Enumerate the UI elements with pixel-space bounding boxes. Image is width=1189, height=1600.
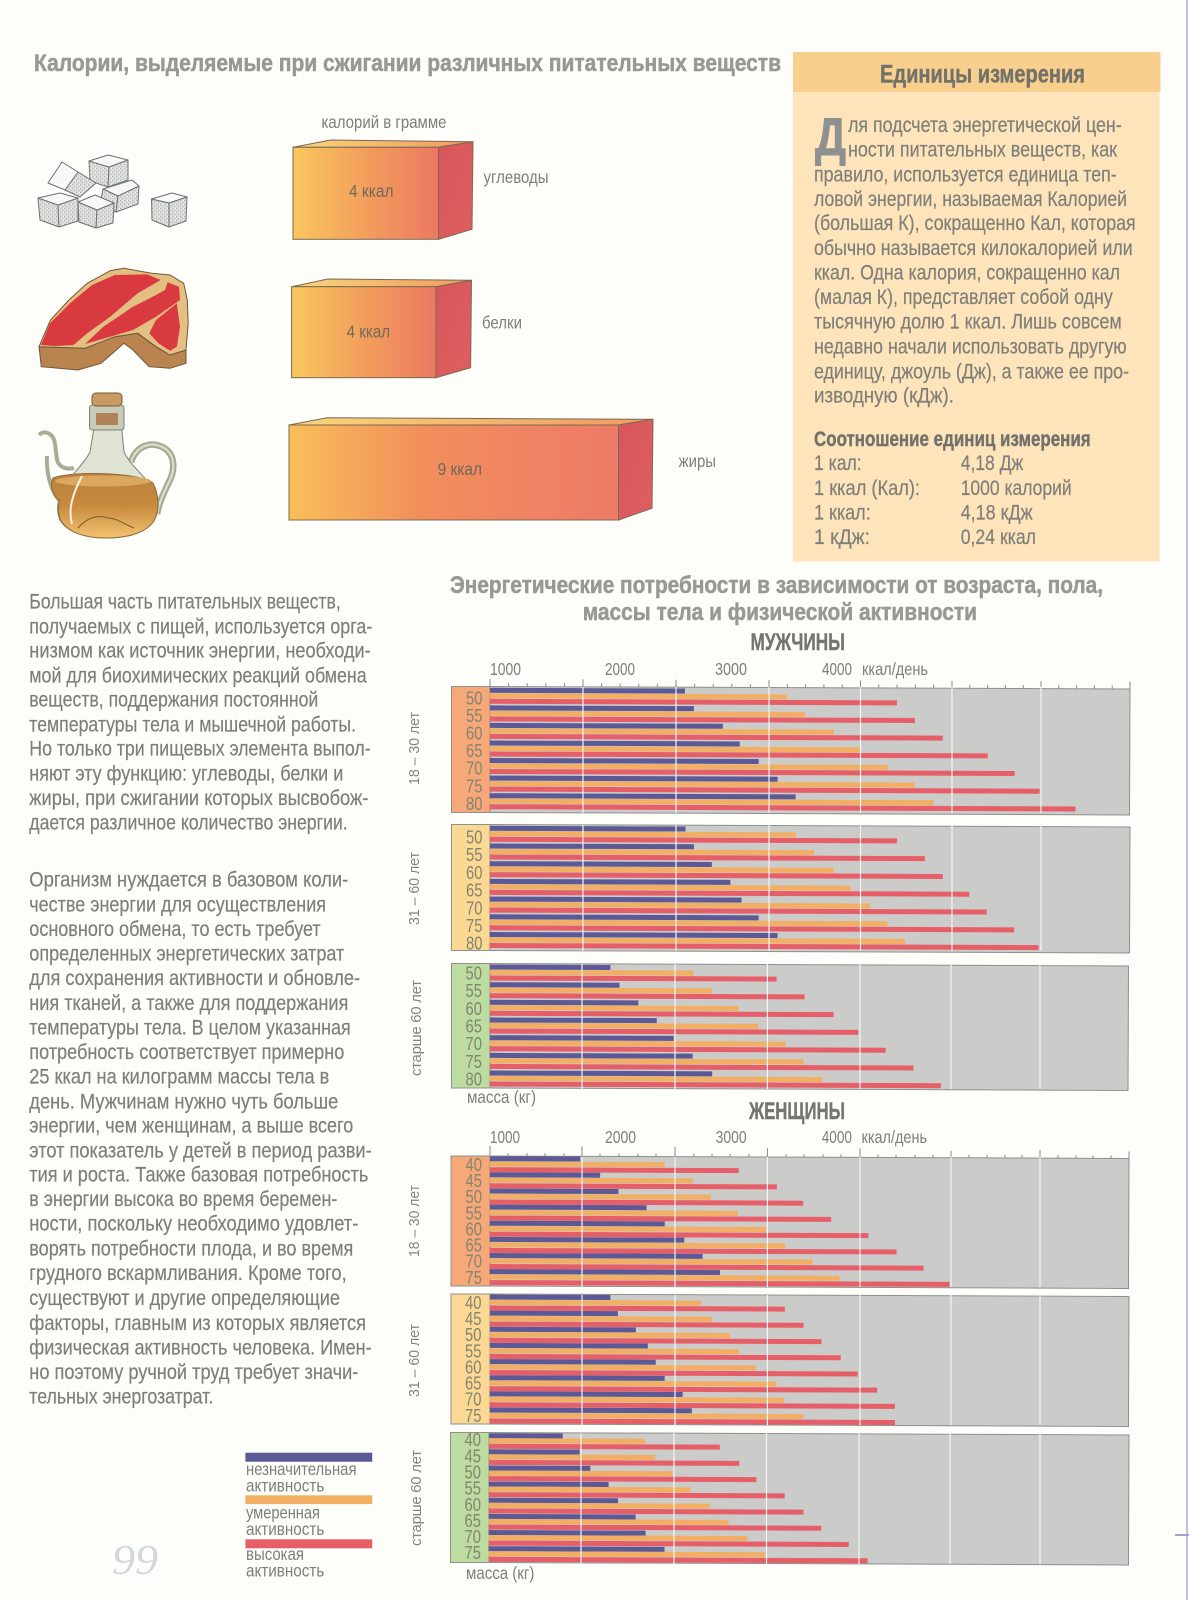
age label: over 60: старше 60 лет (408, 980, 425, 1076)
heading: men: МУЖЧИНЫ (750, 629, 845, 656)
panel: women 18-30 (451, 1155, 1129, 1288)
page edge line (1175, 0, 1189, 1600)
grid (582, 1295, 1040, 1425)
weight labels: 60 (466, 863, 482, 883)
age strip (451, 1156, 490, 1286)
chart background (490, 964, 1128, 1090)
text block: paragraph 2: этот показатель у детей в период разви- (29, 1139, 372, 1162)
weight labels: 75 (466, 1052, 482, 1072)
grid (581, 1433, 1040, 1564)
panel body text: ности питательных веществ, как (848, 139, 1118, 162)
text block: paragraph 2: день. Мужчинам нужно чуть больше (29, 1090, 338, 1113)
legend: высокая (246, 1544, 304, 1564)
text block: paragraph 2: энергии, чем женщинам, а выше всего (29, 1115, 353, 1138)
heading: women: ЖЕНЩИНЫ (748, 1098, 845, 1125)
panel body text: ловой энергии, называемая Калорией (814, 188, 1127, 211)
weight labels: 65 (465, 1374, 481, 1394)
weight labels: 75 (466, 1268, 482, 1288)
chart background (490, 686, 1130, 815)
text block: paragraph 2: для сохранения активности и обновле- (29, 967, 360, 990)
grid (583, 687, 1041, 813)
label: fats: жиры (679, 451, 716, 471)
grid (583, 825, 1041, 951)
panel: men over 60 (452, 964, 1128, 1090)
weight labels: 70 (466, 1252, 482, 1272)
axis: women kcal per day (490, 1127, 1129, 1159)
bars: low activity (490, 690, 796, 797)
text block: paragraph 2: температуры тела. В целом указанная (29, 1016, 351, 1039)
text block: paragraph 2: Организм нуждается в базовом коли- (29, 869, 348, 892)
text block: paragraph 2: физическая активность человека. Имен- (29, 1336, 372, 1359)
weight labels: 75 (466, 916, 482, 936)
weight labels: 45 (465, 1309, 481, 1329)
axis: men kcal per day: 4000 (822, 659, 852, 679)
caption: calories per gram: калорий в грамме (322, 112, 446, 132)
age strip (450, 1432, 489, 1562)
weight labels: 50 (466, 688, 482, 708)
legend: умеренная (246, 1502, 320, 1522)
axis: men kcal per day: 2000 (605, 659, 635, 679)
weight labels: 70 (466, 1034, 482, 1054)
weight labels: 75 (464, 1543, 481, 1563)
weight labels: 65 (466, 881, 482, 901)
text block: paragraph 2: тельных энергозатрат. (29, 1385, 213, 1408)
weight labels: 60 (464, 1495, 481, 1515)
grid (582, 1157, 1040, 1287)
text block: paragraph 2: 25 ккал на килограмм массы тела в (29, 1065, 329, 1088)
panel header (793, 52, 1160, 92)
text block: paragraph 1: жиры, при сжигании которых высвобож- (29, 787, 368, 810)
icon: steak (39, 268, 188, 370)
weight labels: 75 (465, 1406, 481, 1426)
bars: low activity (490, 967, 713, 1074)
weight labels (466, 964, 482, 1090)
legend: активность (246, 1476, 324, 1496)
label: carbohydrates: углеводы (484, 167, 548, 187)
bars: moderate activity (490, 1164, 840, 1278)
title: calories: Калории, выделяемые при сжигании различных питательных веществ (34, 50, 781, 77)
panel: men 18-30 (452, 686, 1130, 815)
legend (245, 1453, 372, 1581)
text block: paragraph 1: веществ, поддержания постоянной (29, 689, 318, 712)
chart background (489, 1432, 1129, 1565)
bars: high activity (490, 701, 1076, 809)
panel body text: тысячную долю 1 ккал. Лишь совсем (814, 310, 1122, 333)
age strip (452, 824, 490, 950)
legend: активность (246, 1561, 324, 1581)
weight labels: 45 (464, 1446, 481, 1466)
bars: high activity (490, 1170, 950, 1284)
label: 4 kcal: 4 ккал (347, 321, 390, 341)
text block: paragraph 1 (29, 590, 372, 834)
bars: high activity (490, 839, 1039, 948)
panel body text: (большая К), сокращенно Кал, которая (814, 212, 1136, 235)
age strip (451, 1294, 490, 1424)
weight labels: 60 (465, 1358, 481, 1378)
icon: oil jug (39, 393, 173, 538)
axis caption: mass: масса (кг) (466, 1563, 534, 1583)
grid (582, 964, 1040, 1089)
panel: units of measurement (793, 52, 1160, 562)
weight labels: 55 (465, 1341, 481, 1361)
panel body text: (малая К), представляет собой одну (814, 286, 1113, 309)
weight labels: 65 (466, 1236, 482, 1256)
weight labels: 55 (464, 1479, 481, 1499)
weight labels: 50 (465, 1325, 481, 1345)
weight labels: 50 (466, 828, 482, 848)
text block: paragraph 2: грудного вскармливания. Кроме того, (29, 1262, 347, 1285)
weight labels (465, 1293, 481, 1426)
conversion table: 1000 калорий (961, 477, 1072, 500)
axis: men kcal per day: 3000 (715, 659, 747, 679)
bars: high activity (490, 978, 941, 1086)
age strip (452, 964, 490, 1088)
age label: 18-30: 18 – 30 лет (406, 712, 423, 785)
conversion table: 0,24 ккал (961, 526, 1036, 549)
panel body text: правило, используется единица теп- (814, 163, 1117, 186)
panel body text: обычно называется килокалорией или (814, 237, 1133, 260)
weight labels: 50 (466, 1187, 482, 1207)
text block: paragraph 2: существуют и другие определяющие (29, 1287, 340, 1310)
conversion table: 4,18 кДж (961, 501, 1033, 524)
weight labels: 65 (464, 1511, 481, 1531)
panel body text: ля подсчета энергетической цен- (848, 114, 1122, 137)
weight labels: 40 (465, 1293, 481, 1313)
weight labels: 45 (466, 1171, 482, 1191)
weight labels: 55 (466, 706, 482, 726)
conversion table: 1 ккал: (814, 501, 871, 524)
age label: 31-60: 31 – 60 лет (406, 1324, 423, 1397)
legend: незначительная (246, 1459, 356, 1479)
text block: paragraph 1: Но только три пищевых элемента выпол- (29, 738, 371, 761)
axis caption: mass: масса (кг) (467, 1087, 536, 1107)
text block: paragraph 2: но поэтому ручной труд требует значи- (29, 1361, 358, 1384)
text block: paragraph 1: няют эту функцию: углеводы, белки и (29, 763, 343, 786)
label: 9 kcal: 9 ккал (438, 459, 482, 479)
text block: paragraph 2: определенных энергетических затрат (29, 943, 345, 966)
text block: paragraph 1: температуры тела и мышечной работы. (29, 714, 356, 737)
weight labels: 70 (466, 898, 482, 918)
drop cap: Д (815, 108, 846, 167)
text block: paragraph 2: ности, поскольку необходимо удовлет- (29, 1213, 358, 1236)
chart background (490, 824, 1130, 953)
weight labels: 50 (466, 964, 482, 984)
panel: women over 60 (450, 1430, 1129, 1565)
weight labels: 50 (464, 1462, 481, 1482)
bars: moderate activity (490, 696, 934, 803)
chart background (490, 1156, 1129, 1288)
weight labels: 40 (464, 1430, 481, 1450)
weight labels: 40 (466, 1155, 482, 1175)
brick: proteins (292, 279, 472, 378)
text block: paragraph 2: тия и роста. Также базовая потребность (29, 1164, 368, 1187)
weight labels: 70 (465, 1390, 481, 1410)
axis: men kcal per day: ккал/день (862, 659, 928, 679)
weight labels: 80 (466, 934, 482, 954)
panel: men 31-60 (452, 824, 1130, 954)
weight labels: 80 (466, 794, 482, 814)
panel body text: недавно начали использовать другую (814, 335, 1127, 358)
bars: high activity (490, 1308, 895, 1423)
text block: paragraph 1: получаемых с пищей, используется орга- (29, 615, 372, 638)
conversion table: 4,18 Дж (961, 452, 1023, 475)
weight labels: 80 (466, 1070, 482, 1090)
weight labels: 65 (466, 741, 482, 761)
conversion table: 1 кал: (814, 452, 862, 475)
conversion table: 1 кДж: (814, 526, 870, 549)
title: energy needs (450, 572, 1103, 626)
text block: paragraph 2: ворять потребности плода, и во время (29, 1237, 353, 1260)
weight labels (466, 828, 482, 954)
panel: women 31-60 (451, 1293, 1129, 1426)
weight labels: 70 (466, 759, 482, 779)
bars: low activity (489, 1436, 665, 1549)
bars: moderate activity (489, 1441, 765, 1555)
text block: paragraph 2: в энергии высока во время беремен- (29, 1188, 337, 1211)
bars: moderate activity (490, 972, 823, 1080)
title: energy needs: Энергетические потребности в зависимости от возраста, пола, (450, 572, 1103, 599)
conversion heading: Соотношение единиц измерения (814, 428, 1091, 451)
text block: paragraph 1: дается различное количество энергии. (29, 811, 348, 834)
text block: paragraph 2: потребность соответствует примерно (29, 1041, 344, 1064)
brick: fats (289, 418, 653, 520)
panel heading: Единицы измерения (880, 60, 1085, 88)
label: 4 kcal: 4 ккал (349, 181, 394, 201)
bars: moderate activity (490, 1302, 804, 1417)
age strip (452, 686, 490, 812)
axis: men kcal per day: 1000 (490, 659, 521, 679)
legend: активность (246, 1519, 324, 1539)
text block: paragraph 2: основного обмена, то есть требует (29, 918, 321, 941)
page number: 99 (112, 1538, 158, 1584)
age label: 18-30: 18 – 30 лет (406, 1185, 423, 1257)
axis: women kcal per day: ккал/день (862, 1127, 927, 1147)
brick: carbohydrates (293, 140, 473, 239)
bars: moderate activity (490, 834, 906, 941)
chart background (490, 1294, 1129, 1426)
age label: over 60: старше 60 лет (408, 1450, 425, 1546)
panel body text: ккал. Одна калория, сокращенно кал (814, 261, 1120, 284)
axis: women kcal per day: 1000 (490, 1127, 520, 1147)
weight labels: 55 (466, 981, 482, 1001)
axis: women kcal per day: 4000 (822, 1127, 852, 1147)
bars: low activity (490, 1159, 720, 1272)
weight labels (464, 1430, 481, 1563)
title: energy needs: массы тела и физической активности (583, 599, 977, 626)
weight labels: 70 (464, 1527, 481, 1547)
axis: women kcal per day: 2000 (605, 1127, 636, 1147)
weight labels: 55 (466, 1203, 482, 1223)
weight labels: 60 (466, 999, 482, 1019)
panel body text: изводную (кДж). (814, 385, 954, 408)
weight labels (466, 1155, 482, 1288)
axis: women kcal per day: 3000 (716, 1127, 747, 1147)
bars: high activity (489, 1446, 868, 1561)
bars: low activity (490, 828, 778, 936)
text block: paragraph 2 (29, 869, 372, 1408)
age label: 31-60: 31 – 60 лет (406, 852, 423, 925)
weight labels: 75 (466, 776, 482, 796)
weight labels (466, 688, 482, 814)
text block: paragraph 1: Большая часть питательных веществ, (29, 590, 341, 613)
weight labels: 60 (466, 1219, 482, 1239)
weight labels: 55 (466, 845, 482, 865)
panel body text (814, 114, 1136, 408)
weight labels: 60 (466, 724, 482, 744)
conversion table (814, 452, 1072, 549)
label: proteins: белки (482, 312, 522, 332)
axis: men kcal per day (490, 659, 1130, 689)
text block: paragraph 1: низмом как источник энергии, необходи- (29, 640, 371, 663)
icon: sugar cubes (38, 155, 187, 228)
text block: paragraph 2: ния тканей, а также для поддержания (29, 992, 348, 1015)
text block: paragraph 2: факторы, главным из которых является (29, 1312, 366, 1335)
text block: paragraph 1: мой для биохимических реакций обмена (29, 664, 367, 687)
panel body text: единицу, джоуль (Дж), а также ее про- (814, 360, 1129, 383)
bars: low activity (490, 1297, 692, 1411)
weight labels: 65 (466, 1016, 482, 1036)
text block: paragraph 2: честве энергии для осуществления (29, 894, 326, 917)
conversion table: 1 ккал (Кал): (814, 477, 920, 500)
